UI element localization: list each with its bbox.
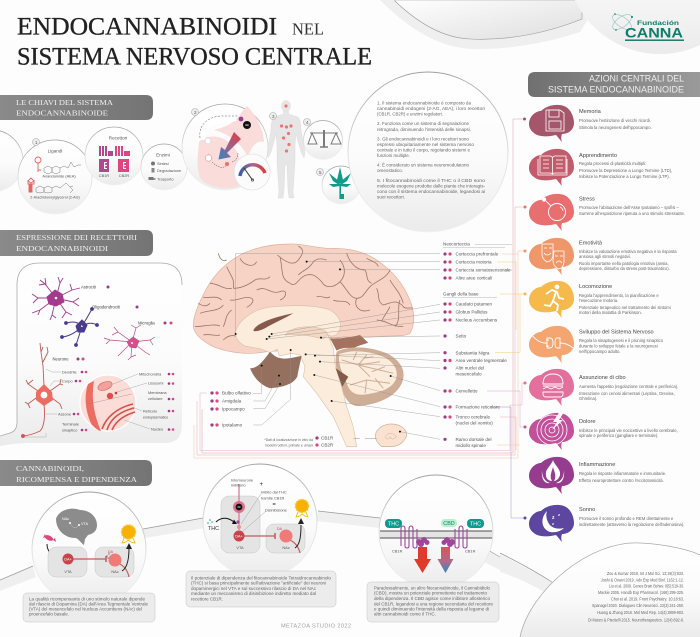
action: sviluppo: durante lo sviluppo fetale e la neurogenesi	[579, 344, 658, 348]
limbic region	[250, 352, 302, 388]
label: gangli della base: Gangli della base	[443, 292, 479, 296]
logo: Fundación CANNA: CANNA	[625, 24, 683, 40]
icon: reward medal	[122, 525, 136, 543]
receptor right	[442, 526, 467, 548]
icon: brain with floppy disk	[529, 105, 574, 142]
panel: cells	[0, 263, 182, 446]
badge 3: 3	[272, 114, 275, 119]
icon: brain with runner	[529, 281, 574, 318]
text: key points: centrale e in tutto il corpo, regolando sistemi e	[377, 148, 471, 152]
icon: grey brain: VTA	[81, 522, 89, 526]
action: memoria: Memoria	[579, 109, 602, 115]
brain cortex with sulci	[193, 244, 414, 353]
panel: references	[500, 543, 700, 637]
action: sonno: indirettamente (attraverso la regolazione dell'adenosina).	[579, 522, 684, 527]
badge 2: 2	[194, 110, 197, 115]
label: membrana cellulare: Membrana	[148, 390, 167, 395]
panel: ligandi	[18, 138, 92, 214]
label: altri nuclei del mesencefalo: Altri nuclei del	[456, 366, 484, 371]
arrow: reduced signal	[438, 547, 454, 573]
bubble: partial left	[0, 130, 23, 192]
text box: CBD	[367, 582, 499, 622]
action: assunzione di cibo: Assunzione di cibo	[579, 375, 626, 381]
action: memoria	[529, 105, 652, 142]
text box: THC: recettore CB1R.	[191, 596, 223, 602]
pill: CBD: CBD	[443, 521, 455, 527]
action: dolore: spinale e periferico (gangliare e terminale).	[579, 433, 658, 438]
action: stress: Promuove l'abituazione dell'Asse Ipotalamo – Ipofisi –	[579, 205, 680, 210]
labels	[231, 478, 287, 512]
action: apprendimento	[529, 149, 672, 186]
text box: THC: (THC) si basa principalmente sull'attivazione "artificiale" dei neuroni	[191, 580, 326, 586]
label: tronco cerebrale	[443, 415, 493, 426]
label: neocorteccia: Neocorteccia	[443, 242, 470, 246]
icon: brain with bomb	[529, 194, 574, 231]
action: sviluppo	[529, 326, 664, 363]
icon: brain with moon: z	[552, 521, 554, 526]
text box: CBD: della dipendenza. Il CBD agisce come inibitore allosterico	[374, 596, 491, 601]
text: citations: Joshi & Onaivi 2019. Adv Exp Med Biol. 1162:1-12.	[601, 578, 684, 582]
ventricle	[253, 313, 293, 331]
action: memoria: Promuove l'estinzione di vecchi ricordi.	[579, 118, 651, 123]
label: assone: Assone	[58, 412, 71, 416]
action: assunzione di cibo: Aumenta l'appetito (regolazione centrale e periferica).	[579, 384, 678, 389]
label: corpo	[50, 378, 81, 386]
label: ramo dorsale	[443, 437, 492, 448]
neuron pathway: DA	[108, 550, 114, 554]
text: citations: Mackie 2005. Handb Exp Pharmacol. (168):299-325.	[598, 590, 684, 595]
top decorative crescent	[380, 0, 600, 49]
action: sviluppo: Regola la sinaptogenesi e il pruning sinaptico	[579, 338, 664, 343]
action: infiammazione: Infiammazione	[579, 462, 615, 468]
label: gangli della base	[443, 292, 497, 298]
label: corpo: Corpo	[62, 378, 73, 384]
connector lines: brain regions to actions	[194, 118, 526, 520]
label: reticolo endoplasmatico	[132, 407, 174, 420]
icon: brain with burger	[529, 369, 574, 406]
text: key points: retrograda, diminuendo l'intensità delle sinapsi.	[377, 127, 471, 132]
action: emotività: depressione, disturbo da stress post-traumatico).	[579, 266, 670, 271]
icon: atom	[610, 12, 634, 32]
label: nucleo: Nucleo	[151, 426, 163, 432]
text box: reward	[23, 593, 155, 622]
heading banner: cannabinoidi: RICOMPENSA E DIPENDENZA	[16, 475, 138, 484]
label: lisosomi: Lisosomi	[148, 380, 163, 386]
text: citations: Liu et al. 2009. Genes Brain Behav. 8(5):519-30.	[609, 584, 684, 588]
label: mitochondria: Mitochondria	[139, 372, 162, 376]
text: citations	[588, 571, 684, 622]
label: ramo dorsale: midollo spinale	[456, 443, 486, 448]
text box: CBD: del CB1R, legandosi a una regione secondaria del recettore	[374, 602, 494, 606]
heading banner: azioni centrali: SISTEMA ENDOCANNABINOIDE	[548, 84, 684, 94]
receptor left	[401, 526, 430, 548]
text box: reward: dal rilascio di Dopamina (DA) dall'Area Tegmentale Ventrale	[29, 602, 149, 606]
icon: grey brain	[56, 509, 97, 545]
brain labels: right side	[443, 242, 512, 448]
panel: scale	[304, 118, 342, 160]
icon: microglia	[104, 325, 155, 360]
icon: brain with book	[529, 149, 574, 186]
panel: enzimi	[141, 144, 187, 190]
labels: Disinibizione	[265, 508, 287, 512]
icon: candy	[43, 534, 56, 542]
text box: THC: mediante un meccanismo di disinibizione indiretto mediato dal	[191, 591, 316, 596]
neuron pathway	[62, 550, 129, 577]
icon: brain with masks	[529, 238, 574, 275]
thalamus	[285, 327, 327, 339]
icon: brain with plug	[529, 326, 574, 363]
action: assunzione di cibo: Interazione con cenosi alimentari (Leptina, Orexina,	[579, 391, 675, 396]
panel: recettori: Recettori	[109, 136, 127, 140]
text: key points: cannabinoidi endogeni (2-AG, AEA), i loro recettori	[377, 106, 485, 111]
heading banner: cannabinoidi	[0, 460, 152, 486]
membrane	[380, 531, 492, 538]
panel: THC disinhibition	[203, 464, 317, 578]
badge 5: 5	[319, 170, 322, 175]
label: caudato putamen: Caudato putamen	[456, 302, 492, 307]
label: astrociti: Astrociti	[81, 284, 96, 290]
legend: CB2R	[321, 443, 334, 448]
heading banner: le chiavi: ENDOCANNABINOIDE	[16, 108, 109, 118]
panel: enzimi: Degradazione	[157, 168, 181, 173]
text box: reward: La qualità ricompensante di uno stimolo naturale dipende	[29, 596, 146, 602]
action: sviluppo: Sviluppo del Sistema Nervoso	[579, 330, 654, 336]
label: neurone: Neurone	[52, 356, 69, 362]
action: locomozione: Regola l'apprendimento, la pianificazione e	[579, 293, 659, 298]
icon: brain with moon: z	[552, 515, 555, 521]
text box: THC: Il potenziale di dipendenza del fitocannabinoide Tetraidrocannabinolo	[191, 576, 332, 580]
label: ramo dorsale: Ramo dorsale del	[456, 437, 492, 442]
action: assunzione di cibo: Ghrelina).	[579, 396, 597, 401]
arrow: gradient downward	[218, 132, 241, 160]
label: corteccia prefrontale: Corteccia prefrontale	[456, 252, 499, 257]
text box: THC	[186, 571, 336, 607]
title	[17, 14, 372, 70]
heading banner: le chiavi: LE CHIAVI DEL SISTEMA	[16, 98, 114, 107]
text: key points	[377, 100, 486, 200]
icon: brain with moon: z	[558, 512, 560, 517]
icon: 2-AG key and molecule	[28, 178, 73, 193]
panel: enzimi: Enzimi	[156, 152, 170, 158]
label: nucleo	[124, 420, 174, 432]
label: bulbo olfattivo: Bulbo olfattivo	[222, 391, 251, 396]
action: locomozione	[529, 281, 671, 318]
icon: gauge	[234, 154, 270, 190]
labels: Inibito dal THC	[261, 490, 287, 494]
text: citations: Huang & Zhang 2016. Mol Med Rep. 14(4):2899-903.	[597, 610, 684, 615]
label: neurone	[52, 356, 84, 362]
action: dolore	[529, 411, 678, 450]
label: ipotalamo: Ipotalamo	[222, 423, 243, 428]
action: stress: Surrene all'esposizione ripetuta a uno stimolo stressante.	[579, 211, 685, 216]
legend: modelli roditori, primate e umani	[265, 444, 313, 448]
label: formazione reticolare: Formazione reticolare	[456, 405, 500, 410]
text box: CBD: Paradossalmente, un altro fitocannabinoide, il Cannabidiolo	[374, 586, 491, 590]
label: altre aree corticali: Altre aree corticali	[456, 276, 492, 281]
action: locomozione: l'esecuzione motoria.	[579, 298, 618, 303]
label: terminale sinaptico: sinaptico	[62, 428, 77, 432]
label: oligodendrociti	[92, 304, 138, 310]
action: dolore: Dolore	[579, 419, 595, 425]
text: key points: molecole esogene prodotte dalle piante che interagis-	[377, 184, 486, 188]
text box: reward: proencefalo basale.	[29, 612, 69, 616]
action: emotività	[529, 238, 677, 275]
neurons: DA	[277, 527, 283, 531]
label: membrana cellulare: cellulare	[148, 396, 162, 401]
icon: scale	[308, 130, 341, 147]
icon: brain with flame	[529, 457, 574, 494]
action: memoria: Stimola la neurogenesi dell'ippocampo.	[579, 125, 652, 130]
panel: CBD allosteric: CB1R	[465, 548, 476, 554]
NAc box: NAc	[111, 569, 119, 574]
badge 4: 4	[306, 120, 309, 125]
label: reticolo endoplasmatico: Reticolo	[143, 408, 157, 414]
label: dendrite: Dendrite	[62, 370, 77, 374]
icon: leaf	[329, 167, 351, 199]
icon: AEA key and molecule	[35, 157, 81, 174]
heading banner: le chiavi	[0, 95, 153, 120]
text box: CBD: altri cannabinoidi come il THC.	[374, 612, 436, 616]
label: membrana cellulare	[148, 390, 174, 401]
labels: inibitorio	[231, 482, 246, 488]
label: reticolo endoplasmatico: endoplasmatico	[143, 416, 168, 420]
label: microglia	[138, 320, 172, 326]
credit: METAZOA STUDIO 2022	[281, 624, 351, 630]
label: cervelletto	[443, 389, 478, 394]
midbrain accent	[330, 335, 368, 351]
arrow: to reward	[122, 548, 129, 571]
label: lisosomi	[117, 380, 174, 392]
action: assunzione di cibo	[529, 369, 678, 406]
text: key points: (CB1R, CB2R) e enzimi regolatori.	[377, 112, 443, 116]
action: stress: Stress	[579, 196, 595, 202]
labels: tramite CB1R	[261, 496, 285, 500]
text box: THC: dopaminergici nel VTA e sul successivo rilascio di DA nel NAc	[191, 586, 316, 591]
THC molecule and arrow: THC	[208, 526, 219, 532]
text: key points: cono con il sistema endocannabinoide, legandosi ai	[377, 189, 485, 194]
label: ippocampo: Ippocampo	[222, 407, 245, 412]
text: key points: 2. Funziona come un sistema di segnalazione	[377, 121, 470, 126]
label: astrociti	[81, 284, 110, 290]
action: apprendimento: Promuove la Depressione a Lungo Termine (LTD),	[579, 168, 672, 173]
panel: synapse and gauge	[182, 104, 270, 190]
title: ENDOCANNABINOIDI	[17, 14, 277, 40]
action: locomozione: Potenziale terapeutico nel trattamento dei sintomi	[579, 305, 671, 310]
title: NEL	[292, 20, 324, 38]
VTA box: VTA	[236, 545, 244, 550]
action: sonno: Sonno	[579, 507, 595, 513]
action: emotività: Emotività	[579, 240, 603, 246]
label: corteccia somatosensoriale: Corteccia somatosensoriale	[456, 268, 511, 273]
cerebellum	[336, 347, 404, 406]
text: citations: Zou & Kumar 2018. Int J Mol Sci. 13;19(3):833.	[607, 571, 684, 576]
label: assone	[46, 412, 79, 416]
label: terminale sinaptico: Terminale	[62, 422, 79, 426]
panel: recettori: CB2R	[119, 173, 129, 178]
panel: ligandi: Ligandi	[48, 148, 62, 154]
label: tronco cerebrale: Tronco cerebrale	[456, 415, 490, 420]
text: key points: espressi ubiquitariamente nel sistema nervoso	[377, 142, 475, 147]
text box: CBD: (CBD), mostra un potenziale promettente nel trattamento	[374, 590, 488, 596]
logo: Fundación CANNA	[566, 0, 700, 54]
title: SISTEMA NERVOSO CENTRALE	[17, 44, 372, 70]
action: emotività: ansiosa agli stimoli negativi.	[579, 254, 631, 259]
spinal cord cross section	[353, 424, 407, 447]
legend: *Dati di localizzazione in vitro da	[264, 438, 313, 442]
label: mitochondria	[113, 372, 174, 384]
heading banner: espressione recettori: ENDOCANNABINOIDI	[16, 244, 109, 253]
heading banner: azioni centrali	[528, 72, 700, 97]
pill: THC left: THC	[388, 522, 399, 528]
panel: reward pathway	[32, 492, 146, 606]
label: setto	[443, 334, 467, 339]
text box: CBD: e quindi diminuendo l'intensità della risposta al legame di	[374, 606, 489, 612]
heading banner: azioni centrali: AZIONI CENTRALI DEL	[589, 74, 684, 84]
labels: +	[260, 482, 264, 488]
text: key points: omeostatico.	[377, 168, 403, 173]
label: cervelletto: Cervelletto	[456, 389, 478, 394]
action: apprendimento: Inibisce la Potenziazione a Lungo Termine (LTP).	[579, 174, 670, 179]
text: key points: 3. Gli endocannabinoidi e i loro recettori sono	[377, 136, 470, 142]
action: sviluppo: nell'ippocampo adulto.	[579, 349, 621, 354]
labels: =	[272, 502, 276, 508]
label: altri nuclei del mesencefalo: mesencefalo	[456, 372, 482, 377]
text: key points: 5. I fitocannabinoidi come il THC o il CBD sono	[377, 178, 486, 183]
action: sonno: Promuove il sonno profondo e REM direttamente e	[579, 516, 674, 521]
label: microglia: Microglia	[138, 320, 155, 326]
action: apprendimento: Regola processi di plasticità multipli:	[579, 161, 646, 166]
text: key points: suoi recettori.	[377, 194, 405, 200]
icon: grey brain: NAc	[62, 517, 69, 521]
text box: reward: (VTA) del mesencefalo nel Nucleus Accumbens (NAc) del	[29, 606, 142, 612]
text: citations: Di Marzo & Piscitelli 2015. Neurotherapeutics. 12(4):692-8.	[588, 618, 684, 622]
icon: astrocyte	[32, 277, 80, 320]
label: dendrite	[46, 369, 87, 374]
labels: Interneurone	[231, 478, 253, 482]
text: key points: 4. È considerato un sistema neuromodulatorio	[377, 162, 470, 168]
label: altri nuclei del mesencefalo	[443, 366, 484, 377]
inset: cell organelles	[80, 375, 136, 431]
panel: human figure	[267, 100, 305, 198]
legend	[264, 436, 334, 448]
synapse pink membranes	[198, 137, 240, 188]
legend: CB1R	[321, 436, 334, 441]
icon: CB2R receptor	[115, 146, 130, 172]
white matter, corpus callosum and brainstem	[235, 306, 357, 447]
text: key points: funzioni multiple.	[377, 153, 410, 158]
arrow: red signal	[414, 547, 431, 573]
label: nucleus accumbens: Nucleus Accumbens	[456, 318, 498, 323]
panel: CBD allosteric	[379, 475, 493, 589]
icon: brain with target and bolt	[529, 411, 574, 450]
NAc box: NAc	[282, 545, 290, 550]
label: tronco cerebrale: (nuclei del vomito)	[456, 421, 493, 426]
action: apprendimento: Apprendimento	[579, 153, 617, 159]
label: neocorteccia	[443, 242, 512, 248]
panel: recettori	[85, 127, 143, 185]
action: infiammazione	[529, 457, 666, 494]
neurons: DA+	[235, 534, 244, 538]
arrow: candy to VTA	[47, 544, 60, 558]
VTA box: VTA	[64, 569, 72, 574]
action: infiammazione: Effetto neuroprotettore contro l'eccitotossicità.	[579, 478, 664, 483]
action: dolore: Inibisce le principali vie nocicettive a livello cerebrale,	[579, 428, 678, 433]
panel: ligandi: Anandamide (AEA)	[42, 174, 76, 178]
label: terminale sinaptico	[25, 422, 87, 437]
heading banner: espressione recettori	[0, 230, 153, 256]
pill: THC right: THC	[470, 522, 481, 528]
arrow: to reward	[295, 525, 301, 548]
logo: Fundación CANNA: Fundación	[637, 20, 679, 27]
icon: neuron	[21, 343, 63, 438]
connector bands	[0, 511, 500, 591]
badge 1: 1	[35, 140, 38, 145]
action: locomozione: Locomozione	[579, 284, 612, 290]
heading banner: cannabinoidi: CANNABINOIDI,	[16, 464, 84, 473]
action: locomozione: motori della malattia di Parkinson.	[579, 310, 642, 315]
text: citations: Choi et al. 2019. Front Psychiatry. 10:18:63.	[611, 596, 684, 602]
label: globus pallidus: Globus Pallidus	[456, 310, 488, 315]
panel: CBD allosteric: CB1R	[392, 548, 403, 554]
icon: CB1R receptor	[99, 146, 113, 172]
action: sonno	[529, 505, 684, 542]
label: substantia nigra: Substantia Nigra	[456, 350, 490, 355]
action: infiammazione: Regola le risposte infiammatorie e immunitarie.	[579, 471, 666, 476]
icon: reward medal	[296, 500, 308, 517]
brain labels: left side	[210, 391, 251, 428]
heading banner: espressione recettori: ESPRESSIONE DEI RECETTORI	[16, 233, 138, 242]
label: oligodendrociti: Oligodendrociti	[92, 304, 120, 310]
label: amigdala: Amigdala	[222, 399, 242, 404]
panel: enzimi: Sintesi	[157, 161, 169, 166]
icon: oligodendrocyte	[61, 308, 98, 346]
label: corteccia motoria: Corteccia motoria	[456, 260, 492, 265]
icon: brain with moon	[529, 505, 574, 542]
brain leader lines and region points	[235, 253, 440, 439]
text: key points: 1. Il sistema endocannabinoide è composto da	[377, 100, 472, 106]
action: emotività: Ruolo importante nella patologia emotiva (ansia,	[579, 261, 669, 266]
panel: key points text circle	[348, 72, 508, 232]
text: citations: Spanagel 2020. Dialogues Clin Neurosci. 22(3):241-250.	[592, 603, 684, 608]
panel: enzimi: Trasporto	[157, 176, 174, 182]
label: area ventrale tegmentale: Area ventrale tegmentale	[456, 358, 507, 363]
action: emotività: Inibisce la valutazione emotiva negativa e la risposta	[579, 249, 677, 254]
neuron pathway: DA+	[64, 558, 73, 562]
panel: recettori: CB1R	[99, 173, 109, 178]
neurons	[233, 484, 300, 553]
panel: ligandi: 2-Arachidonoylglycerol (2-AG)	[30, 196, 80, 200]
action: stress	[529, 194, 685, 231]
label: setto: Setto	[456, 334, 467, 339]
panel: cannabis leaf	[316, 166, 360, 204]
